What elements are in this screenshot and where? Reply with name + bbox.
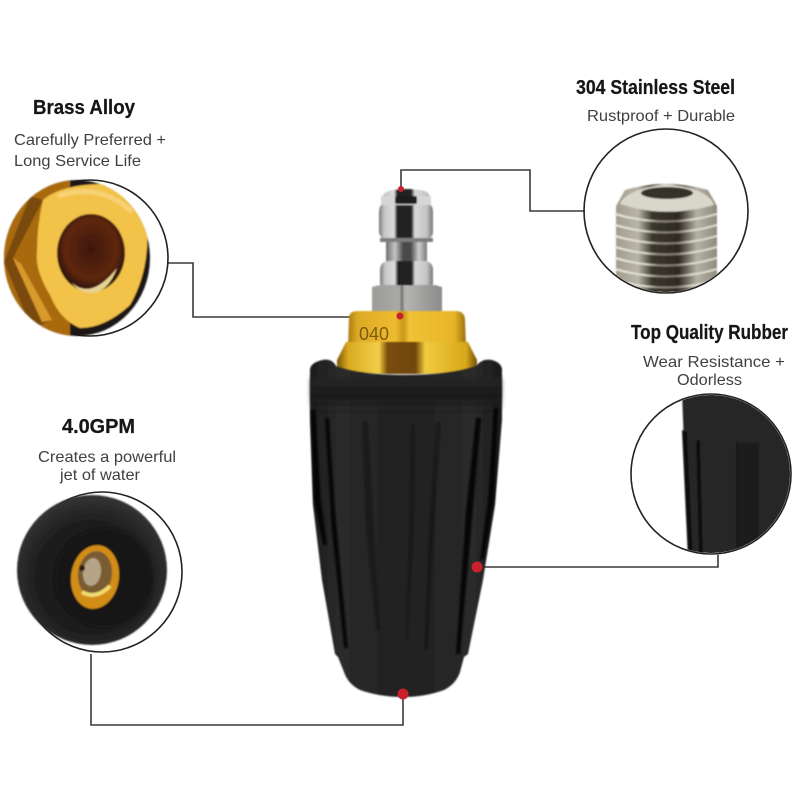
connector lines: [91, 170, 718, 725]
engraved marking: 040: [359, 324, 389, 344]
hex nut: [372, 285, 442, 316]
description: brass alloy: Long Service Life: [14, 153, 141, 170]
circle outline: [22, 492, 182, 652]
panel: brass alloy: [4, 97, 168, 340]
description: brass alloy: Carefully Preferred +: [14, 132, 166, 149]
icon: rubber close-up: [682, 392, 795, 558]
circle outline: [631, 394, 791, 554]
description: flow rate: [38, 449, 176, 484]
brass flange: [337, 342, 477, 374]
red marker dots: [396, 186, 482, 700]
brass top collar: [348, 311, 466, 346]
description: rubber: Odorless: [677, 372, 742, 389]
heading: stainless steel: 304 Stainless Steel: [576, 77, 735, 99]
panel: flow rate: [17, 416, 182, 652]
heading: brass alloy: Brass Alloy: [33, 97, 136, 119]
description: rubber: [643, 354, 785, 389]
description: flow rate: Creates a powerful: [38, 449, 176, 466]
quick connector: [379, 189, 433, 289]
black rubber body: [310, 360, 502, 697]
circle outline: [584, 129, 748, 293]
panel: rubber: [631, 322, 795, 558]
heading: flow rate: 4.0GPM: [62, 416, 135, 438]
icon: nozzle tip front view: [17, 495, 167, 645]
product: pressure washer nozzle: [310, 189, 502, 697]
rubber grooves: [311, 408, 498, 654]
infographic canvas: [2, 78, 792, 726]
description: rubber: Wear Resistance +: [643, 354, 785, 371]
icon: threaded steel fitting: [615, 184, 717, 295]
top band shade: [311, 378, 501, 412]
description: brass alloy: [14, 132, 166, 170]
circle outline: [12, 180, 168, 336]
icon: brass nut close-up: [4, 180, 150, 340]
description: flow rate: jet of water: [59, 467, 141, 484]
description: stainless steel: Rustproof + Durable: [587, 108, 735, 125]
panel: stainless steel: [576, 77, 748, 295]
